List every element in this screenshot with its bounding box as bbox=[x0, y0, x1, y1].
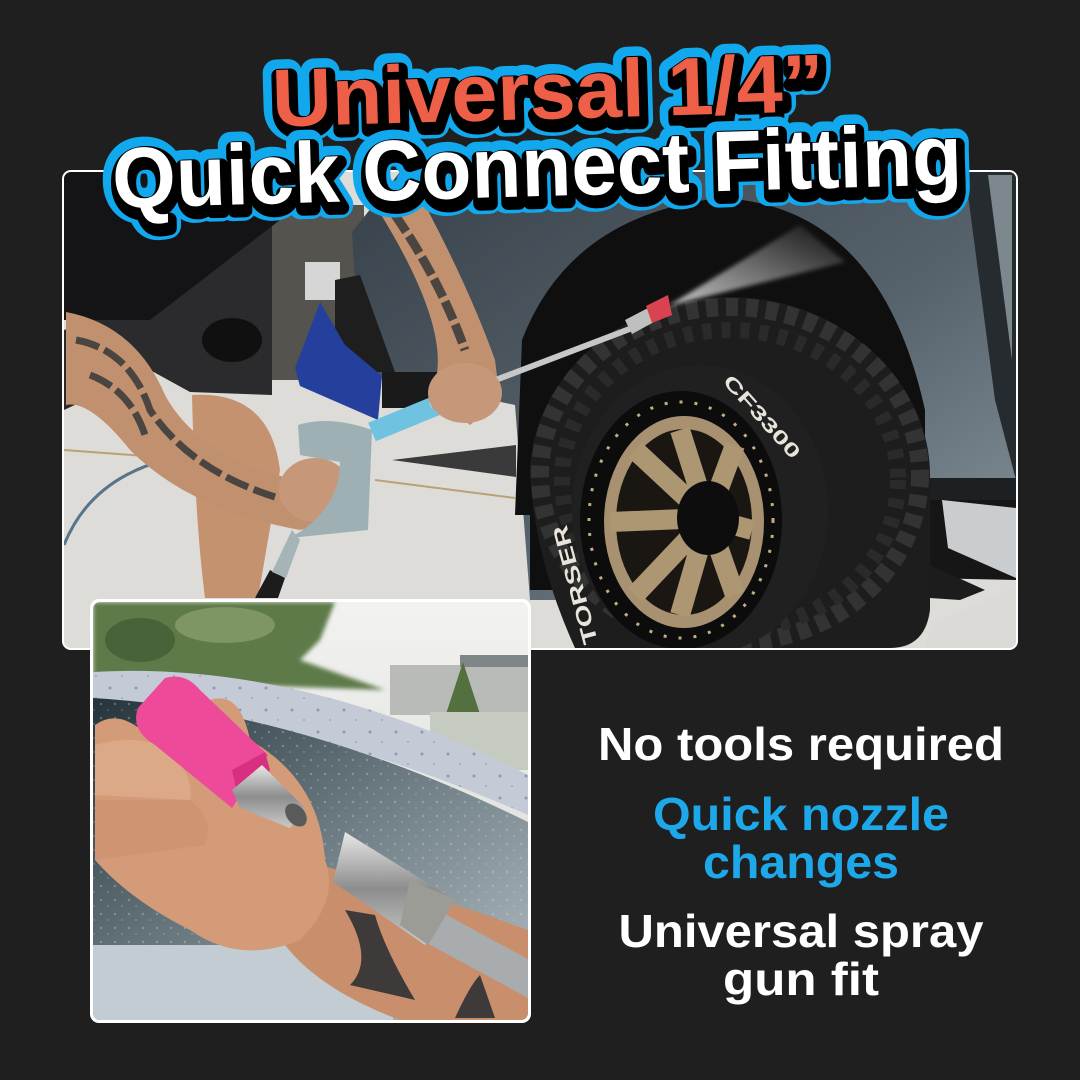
building bbox=[390, 665, 528, 715]
title line 1: Universal 1/4” bbox=[271, 38, 825, 144]
side step bbox=[925, 500, 1016, 580]
benefit: universal spray gun fit: Universal spray bbox=[618, 905, 984, 957]
title bbox=[109, 34, 965, 233]
sky bbox=[93, 602, 528, 822]
spray gun bbox=[290, 421, 372, 538]
truck body bbox=[352, 172, 1016, 600]
benefit: universal spray gun fit: gun fit bbox=[723, 953, 879, 1005]
car window bbox=[93, 698, 528, 1020]
panel: close-up photo of pink nozzle and coupler bbox=[90, 599, 540, 1023]
tyre lettering: CF3300 bbox=[718, 371, 804, 463]
tyre bbox=[530, 297, 930, 648]
benefit: universal spray gun fit bbox=[618, 905, 984, 1005]
panel: main photo of tyre being sprayed: TORSER bbox=[549, 523, 603, 647]
concrete ground bbox=[64, 172, 1016, 648]
pink nozzle bbox=[136, 676, 268, 808]
forearm bbox=[285, 860, 528, 1020]
car roof bbox=[93, 671, 528, 815]
arm left bbox=[66, 312, 340, 530]
metal plug bbox=[232, 765, 305, 828]
benefit: quick nozzle changes: changes bbox=[703, 836, 899, 888]
red nozzle bbox=[625, 308, 654, 334]
arm right bbox=[375, 205, 500, 425]
hand bbox=[95, 698, 329, 950]
wheel arch bbox=[515, 198, 925, 590]
ground right of wheel bbox=[1010, 642, 1016, 648]
metal coupler and wand bbox=[420, 920, 540, 985]
title line 2: Quick Connect Fitting bbox=[111, 110, 963, 230]
title line 1: Universal 1/4” bbox=[273, 44, 827, 150]
title line 1: Universal 1/4” bbox=[271, 41, 825, 147]
title line 2: Quick Connect Fitting bbox=[113, 113, 965, 233]
trees bbox=[93, 602, 385, 690]
benefit: no tools required: No tools required bbox=[598, 718, 1004, 770]
benefit: quick nozzle changes bbox=[653, 788, 949, 888]
title line 2: Quick Connect Fitting bbox=[111, 107, 963, 227]
shorts bbox=[64, 220, 272, 410]
spray mist bbox=[668, 225, 845, 306]
door panel bbox=[93, 945, 393, 1020]
benefit: quick nozzle changes: Quick nozzle bbox=[653, 788, 949, 840]
leg bbox=[192, 395, 280, 598]
wheel rim bbox=[580, 391, 782, 649]
benefit list bbox=[598, 718, 1004, 1005]
t-shirt bbox=[64, 172, 300, 320]
panel: main photo of tyre being sprayed bbox=[62, 170, 1018, 655]
mudguard and bag bbox=[335, 275, 395, 372]
